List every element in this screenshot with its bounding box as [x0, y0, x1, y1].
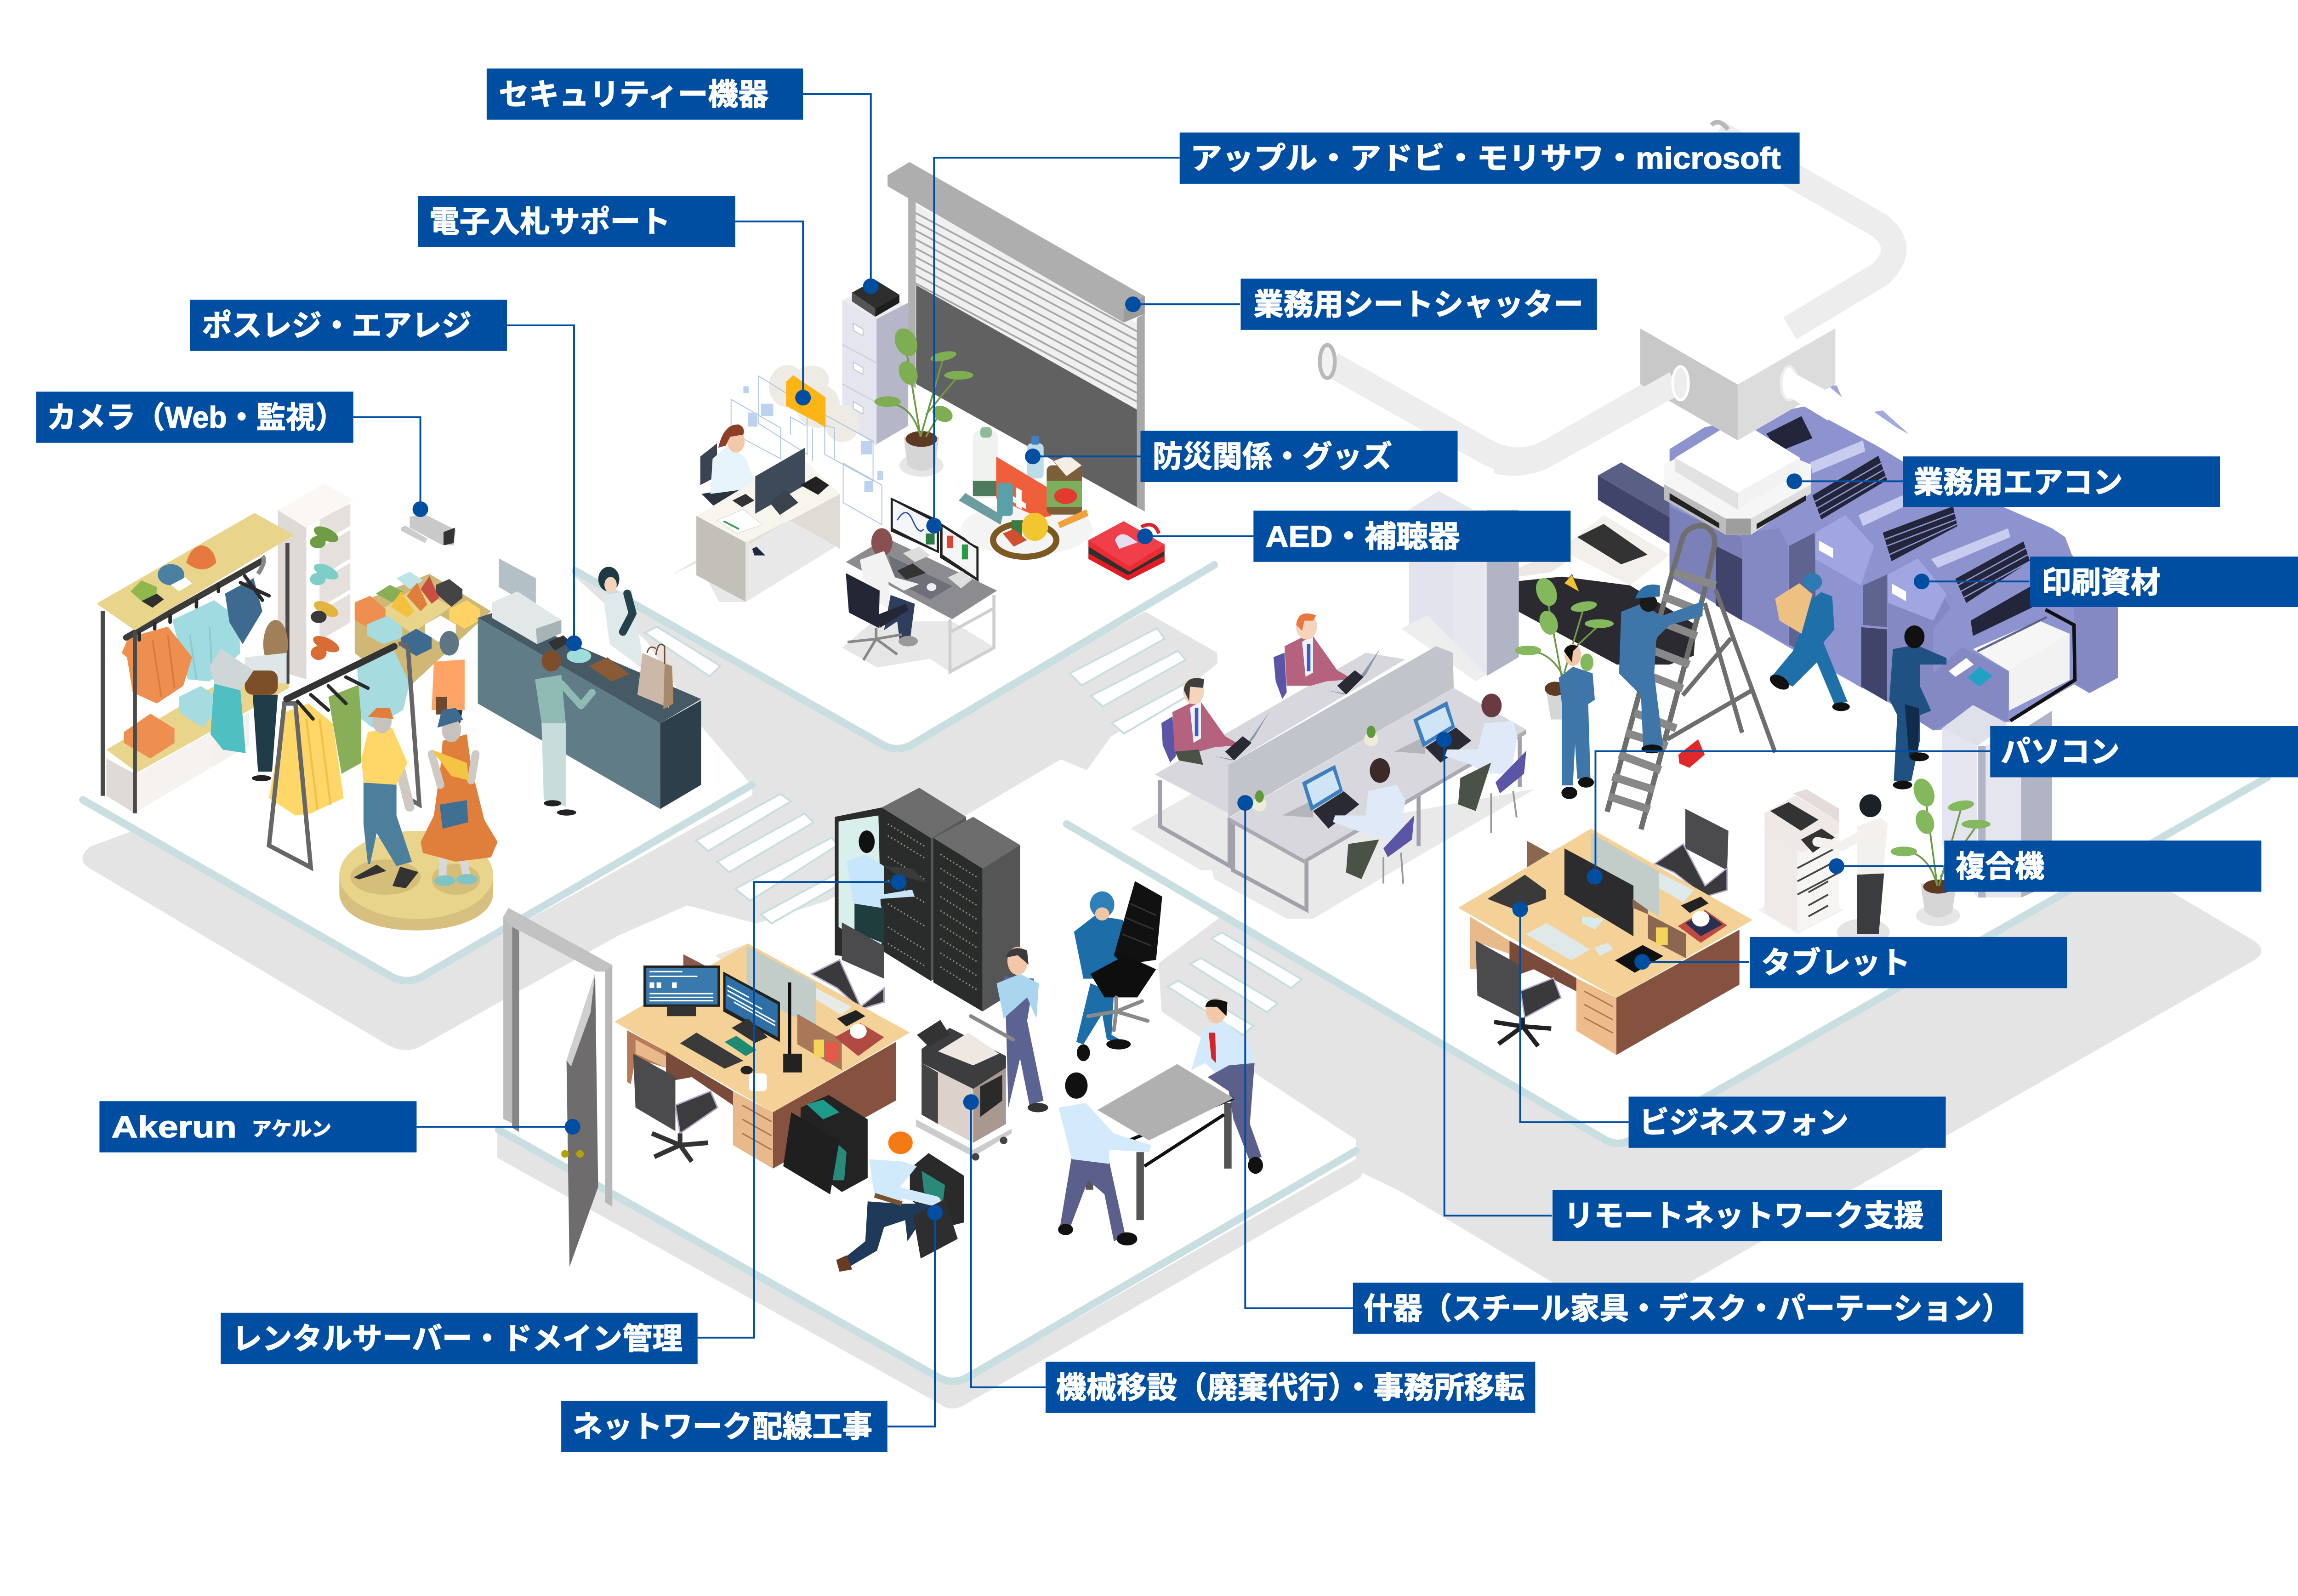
- shared desk: [1131, 646, 1535, 919]
- worker carrying box: [1767, 573, 1850, 711]
- left desk with woman: [671, 425, 840, 602]
- second rack: [269, 644, 419, 868]
- callout: 複合機: [1829, 841, 2261, 892]
- customers: [210, 620, 465, 781]
- kneeling worker: [836, 1131, 964, 1272]
- callout: 什器: 什器（スチール家具・デスク・パーテーション）: [1364, 1292, 2011, 1325]
- air conditioner and duct box: [1494, 328, 1918, 535]
- callout: AED・補聴器: [1137, 511, 1570, 562]
- printing machine: [1519, 386, 2118, 731]
- disaster prevention goods: [959, 427, 1093, 557]
- callout: Akerun: Akerun: [112, 1110, 237, 1144]
- callout: 電子入札サポート: 電子入札サポート: [429, 205, 671, 239]
- callout: 複合機: 複合機: [1956, 850, 2044, 883]
- worker with screwdriver: [1559, 644, 1595, 799]
- callout: タブレット: タブレット: [1761, 946, 1911, 980]
- callout: セキュリティー機器: [487, 68, 879, 294]
- right desk with man and monitors: [842, 497, 997, 672]
- ducts: pipes behind the air conditioner: [1320, 122, 1894, 460]
- panel: right office workers: [1515, 526, 2052, 897]
- copier on cart and worker: [916, 947, 1048, 1161]
- callout: AED・補聴器: AED・補聴器: [1266, 520, 1460, 553]
- shelf tower and shoes: [278, 484, 354, 679]
- callout: ポスレジ・エアレジ: [190, 300, 582, 651]
- panel: server office: [614, 788, 1263, 1272]
- callout: 印刷資材: [1914, 557, 2298, 607]
- security camera: [401, 515, 456, 545]
- callout: アップル・アドビ・モリサワ・microsoft: [926, 132, 1800, 534]
- callout: リモートネットワーク支援: [1436, 732, 1942, 1241]
- plant by copier: [1891, 775, 1991, 926]
- plant: [1515, 575, 1614, 720]
- operator at panel: [1889, 625, 1946, 789]
- plant: [874, 324, 973, 477]
- callout: リモートネットワーク支援: リモートネットワーク支援: [1564, 1199, 1924, 1232]
- callout: ネットワーク配線工事: ネットワーク配線工事: [573, 1410, 872, 1443]
- floor: grey roads, plate edges and white steps: [83, 565, 2267, 1407]
- callout: 業務用エアコン: 業務用エアコン: [1913, 466, 2123, 499]
- cactus pots: [1252, 726, 1378, 812]
- left rack with hats and clothes: [99, 515, 291, 813]
- callout: カメラ: カメラ（Web・監視）: [47, 401, 345, 434]
- table with bags: [355, 572, 491, 693]
- callout: ポスレジ・エアレジ: ポスレジ・エアレジ: [202, 309, 472, 342]
- callout: パソコン: パソコン: [2001, 735, 2120, 769]
- door: [503, 908, 612, 1267]
- AED: [1088, 521, 1165, 580]
- seated colleagues: [1161, 613, 1526, 884]
- callout: ネットワーク配線工事: [561, 1205, 943, 1452]
- callout: セキュリティー機器: セキュリティー機器: [499, 78, 768, 111]
- callout: 印刷資材: 印刷資材: [2042, 566, 2161, 599]
- panel: shared desks: [1131, 613, 1535, 919]
- callout: 機械移設: [963, 1094, 1535, 1413]
- callout: 業務用シートシャッター: [1125, 278, 1597, 330]
- server racks: [811, 788, 1020, 1011]
- callout: パソコン: [1587, 726, 2298, 885]
- desk: [1458, 829, 1752, 1055]
- panel: clothing store: [99, 484, 701, 931]
- callout: レンタルサーバー・ドメイン管理: [221, 874, 906, 1364]
- counter with register and staff: [478, 558, 701, 816]
- panel: top office: [671, 162, 1165, 672]
- callout: 電子入札サポート: [418, 196, 811, 405]
- callout: カメラ: [36, 392, 428, 517]
- table carriers: [1058, 998, 1263, 1245]
- mover with office chair: [1074, 881, 1162, 1061]
- desk with blue monitors: [614, 943, 910, 1169]
- callout: タブレット: [1634, 937, 2067, 988]
- callout: 業務用シートシャッター: 業務用シートシャッター: [1253, 288, 1583, 321]
- right filing cabinet: [1942, 705, 2052, 897]
- callout: 機械移設: 機械移設（廃棄代行）・事務所移転: [1056, 1371, 1524, 1404]
- callout: レンタルサーバー・ドメイン管理: レンタルサーバー・ドメイン管理: [232, 1322, 683, 1355]
- copier and man: [1758, 789, 1890, 945]
- callout: ビジネスフォン: [1512, 902, 1946, 1148]
- callout: 防災関係・グッズ: 防災関係・グッズ: [1153, 440, 1392, 473]
- back cabinets behind desks: [1401, 491, 1519, 682]
- folder in cloud: [731, 365, 883, 525]
- security box on cabinet: [842, 280, 908, 446]
- callout: 什器: [1237, 795, 2023, 1334]
- panel: right desk with phone and copier: [1458, 775, 1991, 1055]
- callout: 業務用エアコン: [1786, 456, 2220, 507]
- callout: Akerun: アケルン: [251, 1119, 331, 1141]
- open PC tower: [783, 1095, 868, 1194]
- platform with mannequins: [339, 708, 498, 931]
- chair behind desk: [1655, 809, 1729, 897]
- callout: アップル・アドビ・モリサワ・microsoft: アップル・アドビ・モリサワ・microsoft: [1190, 142, 1781, 175]
- callout: ビジネスフォン: ビジネスフォン: [1639, 1106, 1849, 1139]
- ladder with worker: [1607, 526, 1775, 829]
- shutter: [887, 162, 1145, 511]
- callout: 防災関係・グッズ: [1025, 431, 1458, 482]
- callout: Akerun: [99, 1101, 580, 1153]
